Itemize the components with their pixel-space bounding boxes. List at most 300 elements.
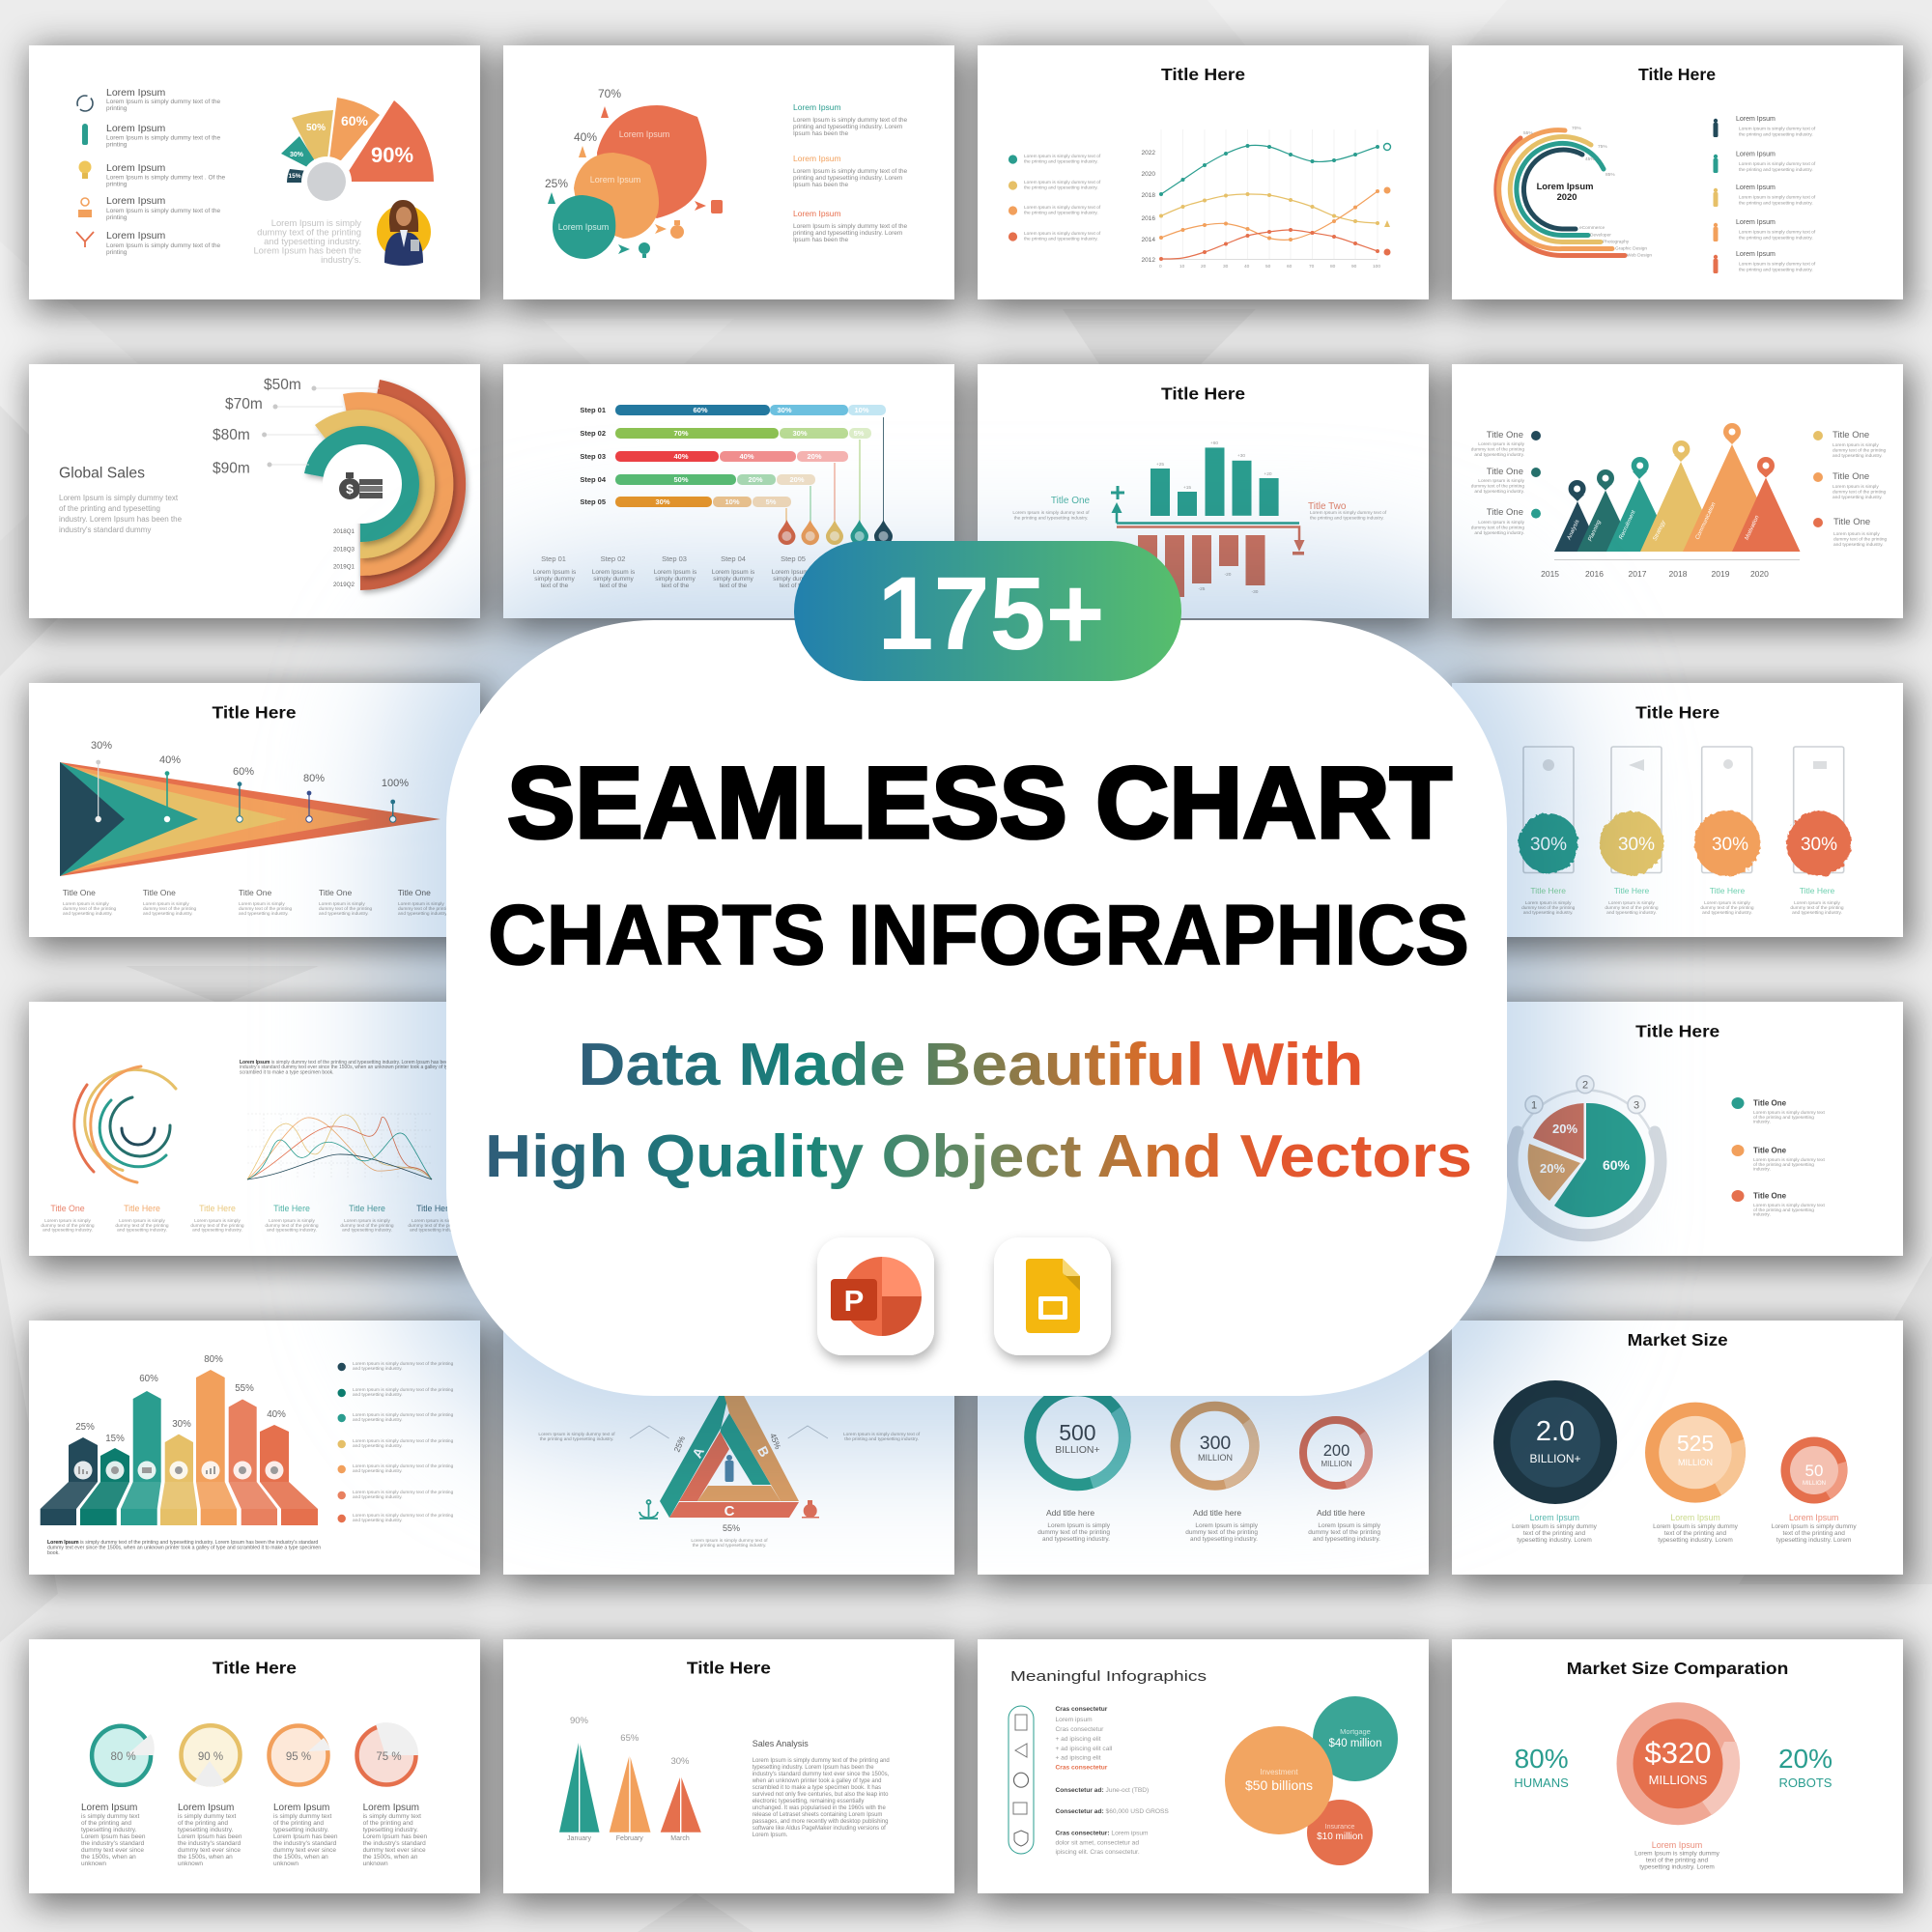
- captions: Lorem Ipsum is simply dummy: [1512, 1523, 1597, 1530]
- side notes: printing and typesetting industry. Lorem: [793, 124, 902, 130]
- left legend: dummy text of the printing: [1471, 446, 1524, 452]
- arc labels: Photography: [1603, 240, 1630, 245]
- stacked bars: Step 02: [580, 429, 606, 438]
- arrow column chart: 40%: [267, 1409, 286, 1420]
- left legend: Title One: [1487, 430, 1523, 440]
- pins: [1569, 423, 1775, 501]
- slide: ring metrics: [978, 1321, 1429, 1575]
- captions: dummy text of the printing: [1790, 905, 1844, 911]
- years: 2019: [1712, 569, 1730, 579]
- value labels: $80m: [213, 427, 250, 443]
- blob chart: 40%: [574, 130, 597, 144]
- captions: Lorem Ipsum is simply: [194, 1219, 241, 1224]
- icon list: Lorem Ipsum: [106, 162, 166, 174]
- ring values: 500: [1059, 1420, 1096, 1445]
- heading: Meaningful Infographics: [1010, 1668, 1207, 1685]
- captions: and typesetting industry.: [1190, 1536, 1258, 1543]
- bubble chart: [1225, 1696, 1398, 1865]
- captions: and typesetting industry.: [239, 911, 289, 917]
- captions: Lorem Ipsum has been: [273, 1833, 338, 1840]
- arrow column chart: 15%: [105, 1434, 125, 1444]
- captions: of the printing and: [363, 1820, 413, 1827]
- people list: Lorem Ipsum: [1736, 151, 1776, 158]
- title: Market Size Comparation: [1567, 1659, 1788, 1678]
- captions: dummy text ever since: [273, 1847, 336, 1854]
- gauge pie chart: 20%: [1540, 1161, 1565, 1176]
- robots stat: 20%: [1778, 1744, 1833, 1774]
- numbered markers: 3: [1634, 1099, 1639, 1111]
- funnel chart: 80%: [303, 773, 325, 784]
- penrose triangle: 55%: [723, 1523, 740, 1533]
- sales analysis text: Lorem Ipsum is simply dummy text of the printing and: [753, 1758, 890, 1764]
- brush blobs: [1519, 810, 1851, 876]
- slide: global sales rings: [29, 364, 480, 618]
- ring 80 percent: 80 %: [110, 1751, 136, 1763]
- details list: [1055, 1706, 1169, 1856]
- captions: dummy text ever since: [178, 1847, 241, 1854]
- right legend: dummy text of the printing: [1833, 489, 1887, 495]
- line chart: 2020: [1142, 171, 1155, 178]
- title: Title Here: [1161, 65, 1245, 84]
- details list: + ad ipiscing elit: [1055, 1736, 1101, 1743]
- line chart: 90: [1351, 264, 1357, 270]
- quarter labels: 2018Q3: [333, 546, 355, 553]
- step descriptions: text of the: [720, 582, 748, 589]
- captions: Lorem Ipsum is simply: [1525, 901, 1572, 906]
- sales analysis text: software like Aldus PageMaker including versions of: [753, 1826, 886, 1832]
- legend: Lorem Ipsum is simply dummy text: [1753, 1111, 1825, 1116]
- headline: seamless chart: SEAMLESS CHART: [507, 747, 1452, 860]
- arc chart: [1496, 130, 1625, 255]
- icon list: printing: [106, 249, 128, 256]
- left legend: Lorem Ipsum is simply: [1478, 521, 1524, 526]
- spike chart: March: [670, 1835, 690, 1842]
- captions: Lorem Ipsum has been: [81, 1833, 146, 1840]
- central circle: $320: [1645, 1736, 1711, 1770]
- right legend: and typesetting industry.: [1833, 542, 1884, 548]
- icon: powerpoint: P: [844, 1284, 864, 1318]
- legend: of the printing and typesetting: [1753, 1115, 1814, 1121]
- arc labels: Lorem Ipsum: [1537, 181, 1593, 191]
- bubble chart: $10 million: [1317, 1832, 1363, 1842]
- captions: Title Here: [349, 1204, 385, 1213]
- captions: and typesetting industry.: [143, 911, 193, 917]
- captions: dummy text of the printing: [1037, 1529, 1110, 1536]
- caption: text of the printing and: [1646, 1857, 1709, 1864]
- arc labels: 75%: [1598, 144, 1607, 150]
- right legend: Lorem Ipsum is simply: [1833, 485, 1879, 490]
- side notes: Lorem Ipsum is simply dummy text of the: [793, 168, 907, 175]
- ring values: 200: [1323, 1442, 1350, 1460]
- legend: industry.: [1753, 1120, 1771, 1125]
- details list: Cras consectetur: Lorem ipsum: [1055, 1831, 1149, 1837]
- captions: dummy text of the printing: [63, 906, 117, 912]
- captions: and typesetting industry.: [1523, 910, 1574, 916]
- blob chart: Lorem Ipsum: [619, 129, 669, 139]
- ring values: MILLION: [1198, 1453, 1233, 1463]
- people list: Lorem Ipsum is simply dummy text of: [1739, 128, 1815, 131]
- icon list: Lorem Ipsum: [106, 123, 166, 134]
- legend: [1009, 154, 1101, 242]
- description: industry. Lorem Ipsum has been the: [59, 515, 183, 524]
- captions: the 1500s, when an: [81, 1854, 136, 1861]
- title one note: the printing and typesetting industry.: [1014, 516, 1088, 522]
- legend: Lorem Ipsum is simply dummy text of the printing: [353, 1388, 453, 1393]
- value labels: $90m: [213, 460, 250, 477]
- slide: semi-circular percent fan: [29, 45, 480, 299]
- line chart: 20: [1201, 264, 1207, 270]
- people list: Lorem Ipsum: [1736, 116, 1776, 123]
- sales analysis text: industry's standard dummy text ever since the 1500s,: [753, 1772, 890, 1777]
- captions: dummy text of the printing: [143, 906, 197, 912]
- bubble chart: Mortgage: [1340, 1727, 1371, 1736]
- quarter labels: 2019Q1: [333, 563, 355, 570]
- captions: dummy text of the printing: [115, 1223, 169, 1229]
- humans stat: 80%: [1515, 1744, 1569, 1774]
- side notes: Lorem Ipsum is simply dummy text of: [691, 1539, 768, 1544]
- sales analysis text: release of Letraset sheets containing Lorem Ipsum: [753, 1812, 882, 1818]
- left legend: [1471, 430, 1541, 536]
- circle: 2.0 billion: [1493, 1380, 1617, 1504]
- captions: typesetting industry.: [273, 1827, 329, 1833]
- years: 2016: [1585, 569, 1604, 579]
- title one note: [1012, 496, 1091, 522]
- captions: Lorem Ipsum is simply: [1704, 901, 1750, 906]
- captions: Lorem Ipsum: [1530, 1513, 1579, 1522]
- legend: industry.: [1753, 1167, 1771, 1173]
- ring values: BILLION+: [1055, 1444, 1100, 1456]
- circle: 2.0 billion: 2.0: [1536, 1416, 1575, 1447]
- captions: the 1500s, when an: [178, 1854, 233, 1861]
- legend: and typesetting industry.: [353, 1392, 403, 1398]
- captions: Lorem Ipsum is simply: [119, 1219, 165, 1224]
- step descriptions: simply dummy: [655, 576, 696, 582]
- arc labels: 55%: [1523, 130, 1533, 136]
- central circle: MILLIONS: [1649, 1773, 1708, 1787]
- captions: Title One: [50, 1204, 85, 1213]
- captions: the 1500s, when an: [273, 1854, 328, 1861]
- captions: [63, 888, 452, 917]
- side notes: Lorem Ipsum is simply dummy text of: [843, 1433, 920, 1437]
- humans stat: [1514, 1744, 1569, 1790]
- title two note: Title Two: [1308, 501, 1347, 512]
- captions: Lorem Ipsum: [363, 1803, 419, 1813]
- stacked bars: 20%: [807, 452, 822, 461]
- fan chart: 15%: [288, 173, 301, 180]
- legend: and typesetting industry.: [353, 1518, 403, 1523]
- captions: the industry's standard: [363, 1840, 426, 1847]
- side notes: Ipsum has been the: [793, 237, 848, 243]
- legend: Lorem Ipsum is simply dummy text of the printing: [353, 1413, 453, 1418]
- blob labels: 30%: [1530, 835, 1567, 855]
- numbered markers: 2: [1582, 1080, 1588, 1092]
- line chart: 2014: [1142, 237, 1155, 243]
- captions: Title Here: [273, 1204, 310, 1213]
- details list: Consectetur ad: $60,000 USD GROSS: [1055, 1808, 1169, 1815]
- icon list: Lorem Ipsum: [106, 87, 166, 99]
- legend: and typesetting industry.: [353, 1468, 403, 1474]
- stacked bars: 70%: [673, 429, 689, 438]
- captions: Lorem Ipsum is simply: [44, 1219, 91, 1224]
- paragraph: scrambled it to make a type specimen book.: [240, 1069, 334, 1075]
- line chart: 30: [1223, 264, 1229, 270]
- tagline line one: Data Made Beautiful With: [578, 1032, 1364, 1098]
- step descriptions: Lorem Ipsum is: [712, 569, 754, 576]
- step descriptions: Step 05: [781, 554, 806, 563]
- heading: global sales: Global Sales: [59, 466, 145, 481]
- details list: + ad ipiscing elit: [1055, 1755, 1101, 1762]
- years: [1541, 569, 1769, 579]
- icon: person: [724, 1455, 734, 1482]
- captions: and typesetting industry.: [1702, 910, 1752, 916]
- rotated labels: Motivation: [1745, 514, 1761, 541]
- icon list: Lorem Ipsum is simply dummy text of the: [106, 208, 220, 214]
- captions: and typesetting industry.: [192, 1228, 242, 1234]
- penrose triangle: [660, 1386, 799, 1533]
- right legend: and typesetting industry.: [1833, 495, 1883, 500]
- arc labels: eCommerce: [1579, 225, 1605, 231]
- sales analysis text: electronic typesetting, remaining essentially: [753, 1799, 864, 1804]
- captions: Lorem Ipsum is simply: [412, 1219, 458, 1224]
- gray note: industry's.: [321, 254, 361, 265]
- legend: and typesetting industry.: [353, 1443, 403, 1449]
- people list: Lorem Ipsum is simply dummy text of: [1739, 162, 1815, 167]
- side notes: the printing and typesetting industry.: [693, 1543, 766, 1548]
- side notes: [793, 102, 908, 243]
- icon list: Lorem Ipsum: [106, 230, 166, 242]
- fan chart: 50%: [306, 123, 326, 133]
- side notes: Lorem Ipsum is simply dummy text of: [538, 1433, 615, 1437]
- blob labels: 30%: [1801, 835, 1837, 855]
- slide: concentric arcs: [1452, 45, 1903, 299]
- fan chart: [281, 98, 434, 207]
- ring 90 percent: 90 %: [198, 1751, 223, 1763]
- bubble chart: Insurance: [1325, 1824, 1354, 1831]
- gauge pie chart: 20%: [1552, 1122, 1577, 1136]
- captions: typesetting industry. Lorem: [1776, 1537, 1851, 1544]
- icon list: printing: [106, 182, 128, 188]
- icon list: printing: [106, 214, 128, 221]
- legend: industry.: [1753, 1212, 1771, 1218]
- title: Title Here: [213, 1659, 297, 1678]
- ring 90 percent: [182, 1725, 240, 1787]
- rotated labels: Communication: [1695, 501, 1718, 541]
- slide: meaningful infographics: [978, 1639, 1429, 1893]
- captions: and typesetting industry.: [410, 1228, 460, 1234]
- icon capsule: [1009, 1706, 1034, 1854]
- side notes: printing and typesetting industry. Lorem: [793, 230, 902, 237]
- stacked bars: Step 03: [580, 452, 606, 461]
- stacked bars: 30%: [777, 406, 792, 414]
- captions: the 1500s, when an: [363, 1854, 418, 1861]
- step descriptions: text of the: [541, 582, 569, 589]
- diverging bar chart: -20: [1225, 572, 1232, 578]
- details list: + ad ipiscing elit call: [1055, 1746, 1113, 1752]
- captions: typesetting industry.: [178, 1827, 234, 1833]
- side notes: [538, 1432, 921, 1548]
- captions: [1037, 1508, 1381, 1543]
- rotated labels: Strategy: [1653, 519, 1667, 542]
- slide: penrose triangle: [503, 1321, 954, 1575]
- captions: dummy text of the printing: [1308, 1529, 1380, 1536]
- years: 2018: [1669, 569, 1688, 579]
- bubble chart: Investment: [1260, 1768, 1298, 1776]
- circle: 525 million: 525: [1677, 1431, 1714, 1456]
- title: Title Here: [213, 703, 297, 723]
- captions: Title One: [143, 888, 176, 897]
- captions: Add title here: [1046, 1508, 1094, 1518]
- captions: the industry's standard: [178, 1840, 242, 1847]
- captions: unknown: [273, 1861, 298, 1867]
- years: 2020: [1750, 569, 1769, 579]
- diverging bar chart: [1111, 440, 1304, 597]
- captions: and typesetting industry.: [398, 911, 448, 917]
- captions: Add title here: [1317, 1508, 1365, 1518]
- captions: Lorem Ipsum: [273, 1803, 329, 1813]
- captions: Lorem Ipsum is simply: [143, 902, 189, 907]
- value labels: $70m: [225, 396, 263, 412]
- legend: Title One: [1753, 1146, 1787, 1155]
- gray note: and typesetting industry.: [264, 236, 361, 246]
- right legend: [1813, 430, 1888, 548]
- title: Title Here: [1635, 1022, 1719, 1041]
- ring charts: [1030, 1390, 1369, 1486]
- gray note: Lorem Ipsum is simply: [271, 217, 361, 228]
- side notes: the printing and typesetting industry.: [844, 1436, 919, 1442]
- curve chart: [247, 1114, 432, 1179]
- people list: Lorem Ipsum is simply dummy text of: [1739, 263, 1815, 267]
- stacked bars: 30%: [792, 429, 808, 438]
- legend: the printing and typesetting industry.: [1024, 158, 1098, 164]
- details list: Cras consectetur: [1055, 1726, 1104, 1733]
- ring 95 percent: [269, 1725, 330, 1785]
- step descriptions: simply dummy: [593, 576, 635, 582]
- captions: the industry's standard: [273, 1840, 337, 1847]
- funnel chart: 100%: [382, 778, 409, 789]
- ring 75 percent: [357, 1722, 418, 1785]
- stacked bars: 5%: [766, 497, 777, 506]
- captions: dummy text of the printing: [319, 906, 373, 912]
- captions: of the printing and: [178, 1820, 228, 1827]
- stacked bars: 5%: [854, 429, 865, 438]
- left legend: Title One: [1487, 507, 1523, 518]
- slide: funnel triangles: [29, 683, 480, 937]
- captions: dummy text ever since: [81, 1847, 144, 1854]
- arc labels: Developer: [1590, 232, 1611, 238]
- left legend: Lorem Ipsum is simply: [1478, 442, 1524, 447]
- line chart: 0: [1159, 264, 1162, 270]
- step descriptions: Step 04: [721, 554, 746, 563]
- ring 95 percent: 95 %: [286, 1751, 311, 1763]
- stacked bars: [580, 405, 886, 507]
- arc labels: Web Design: [1627, 253, 1652, 259]
- circle: 50 million: [1781, 1437, 1847, 1503]
- captions: Lorem Ipsum is simply: [63, 902, 109, 907]
- rotated labels: [1566, 501, 1761, 542]
- legend: Lorem Ipsum is simply dummy text of the printing: [353, 1491, 453, 1495]
- legend: [1731, 1097, 1826, 1218]
- captions: [1512, 1513, 1857, 1544]
- people list: Lorem Ipsum: [1736, 219, 1776, 226]
- captions: and typesetting industry.: [319, 911, 369, 917]
- captions: of the printing and: [273, 1820, 324, 1827]
- slide: brush percent blobs: [1452, 683, 1903, 937]
- captions: Lorem Ipsum has been: [178, 1833, 242, 1840]
- captions: Lorem Ipsum has been: [363, 1833, 427, 1840]
- captions: typesetting industry.: [81, 1827, 137, 1833]
- slide: progress rings: [29, 1639, 480, 1893]
- blob chart: 25%: [545, 177, 568, 190]
- right legend: dummy text of the printing: [1833, 536, 1888, 542]
- ring values: [1055, 1420, 1352, 1468]
- icon list: Lorem Ipsum is simply dummy text of the: [106, 135, 220, 141]
- left legend: Lorem Ipsum is simply: [1478, 479, 1524, 484]
- stacked bars: 20%: [748, 475, 763, 484]
- captions: is simply dummy text: [81, 1813, 139, 1820]
- legend: Lorem Ipsum is simply dummy text of the printing: [353, 1464, 453, 1469]
- side notes: Lorem Ipsum: [793, 154, 841, 163]
- legend: the printing and typesetting industry.: [1024, 211, 1098, 216]
- spike chart: [559, 1716, 701, 1842]
- captions: dummy text of the printing: [41, 1223, 95, 1229]
- blob chart: 70%: [598, 87, 621, 100]
- details list: dolor sit amet, consectetur ad: [1055, 1839, 1139, 1846]
- arc labels: 70%: [1572, 126, 1581, 131]
- arrow column chart: 60%: [139, 1374, 158, 1384]
- line chart: 10: [1179, 264, 1185, 270]
- arrow column chart: 30%: [172, 1419, 191, 1430]
- captions: Title Here: [1530, 886, 1566, 895]
- arc labels: [1523, 126, 1652, 259]
- diverging bar chart: +30: [1237, 453, 1245, 459]
- sales analysis text: Sales Analysis: [753, 1739, 809, 1748]
- people list: the printing and typesetting industry.: [1739, 131, 1813, 137]
- right legend: Lorem Ipsum is simply: [1833, 532, 1880, 537]
- icon list: Lorem Ipsum: [106, 195, 166, 207]
- captions: and typesetting industry.: [1042, 1536, 1110, 1543]
- captions: text of the printing and: [1523, 1530, 1586, 1537]
- spike chart: 65%: [620, 1733, 639, 1744]
- legend: Lorem Ipsum is simply dummy text of: [1024, 155, 1100, 159]
- captions: Title One: [63, 888, 96, 897]
- stacked bars: 10%: [724, 497, 740, 506]
- captions: Lorem Ipsum is simply: [1318, 1522, 1380, 1529]
- captions: dummy text of the printing: [1605, 905, 1659, 911]
- title two note: [1308, 501, 1387, 522]
- gray note: dummy text of the printing: [257, 226, 361, 238]
- title one note: Title One: [1051, 496, 1091, 506]
- arrow column chart: [41, 1354, 318, 1525]
- captions: dummy text of the printing: [190, 1223, 244, 1229]
- side notes: the printing and typesetting industry.: [540, 1436, 613, 1442]
- funnel chart: 60%: [233, 766, 254, 778]
- central circle: [1617, 1702, 1740, 1825]
- sales analysis text: [752, 1739, 890, 1838]
- title: Title Here: [1635, 703, 1719, 723]
- rotated labels: Planning: [1587, 519, 1603, 542]
- sales analysis text: when an unknown printer took a galley of type and: [752, 1778, 881, 1784]
- line chart: 2016: [1142, 215, 1155, 222]
- captions: dummy text of the printing: [408, 1223, 462, 1229]
- step descriptions: Lorem Ipsum is: [654, 569, 696, 576]
- captions: is simply dummy text: [178, 1813, 236, 1820]
- funnel chart: 40%: [159, 754, 181, 766]
- people list: [1714, 116, 1816, 273]
- captions: and typesetting industry.: [117, 1228, 167, 1234]
- badge: 175+: [794, 541, 1181, 681]
- captions: Title Here: [1800, 886, 1835, 895]
- captions: Lorem Ipsum is simply: [1608, 901, 1655, 906]
